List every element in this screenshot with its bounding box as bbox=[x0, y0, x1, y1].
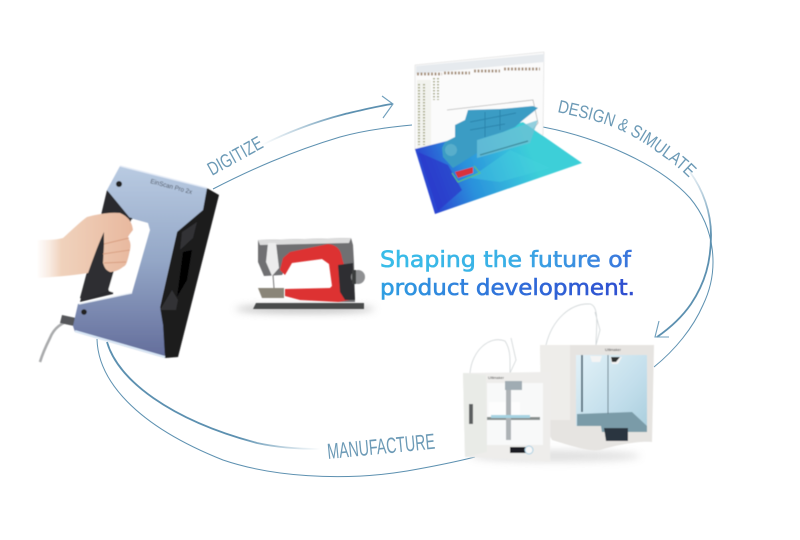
scanner with hand bbox=[37, 166, 219, 362]
cable bbox=[40, 320, 73, 362]
grip bbox=[80, 212, 132, 300]
sensors bbox=[116, 181, 122, 187]
black handle bbox=[80, 190, 133, 302]
mechanism bbox=[338, 263, 355, 300]
black side panel bbox=[160, 187, 219, 358]
needle bed bbox=[258, 288, 284, 298]
label: manufacture: MANUFACTURE bbox=[326, 429, 436, 464]
simulation plate bbox=[415, 122, 582, 214]
handle opening bbox=[106, 219, 148, 293]
scanner body bbox=[73, 166, 207, 358]
red hot spot bbox=[455, 167, 473, 178]
big printer bbox=[540, 345, 654, 450]
model name: EinScan Pro 2x bbox=[149, 178, 194, 196]
grey body bbox=[258, 238, 355, 302]
base bbox=[253, 303, 364, 309]
big printer filament bbox=[546, 304, 600, 345]
small printer filament bbox=[470, 338, 516, 373]
arrow: design and simulate bbox=[543, 127, 713, 367]
translucent model base bbox=[477, 120, 538, 158]
tagline bbox=[380, 248, 635, 301]
small printer bbox=[463, 372, 551, 462]
path for design label bbox=[557, 112, 692, 181]
3d printers bbox=[463, 304, 654, 462]
tagline line 2: product development. bbox=[380, 276, 635, 301]
hand bbox=[37, 213, 133, 278]
sewing machine bbox=[235, 238, 375, 313]
software window bbox=[415, 52, 544, 150]
tagline line 1: Shaping the future of bbox=[380, 248, 632, 273]
arrow: digitize bbox=[213, 96, 412, 189]
label: design and simulate: DESIGN & SIMULATE bbox=[558, 100, 697, 178]
blue model bbox=[442, 106, 538, 168]
design and simulate screen bbox=[415, 52, 582, 214]
label: digitize: DIGITIZE bbox=[204, 133, 267, 180]
big printer logo: Ultimaker bbox=[605, 348, 622, 352]
red arm bbox=[280, 244, 350, 302]
base shadow bbox=[235, 305, 375, 313]
printer shadow bbox=[470, 450, 640, 462]
small printer logo: Ultimaker bbox=[488, 376, 505, 380]
arrow: manufacture bbox=[97, 339, 475, 477]
